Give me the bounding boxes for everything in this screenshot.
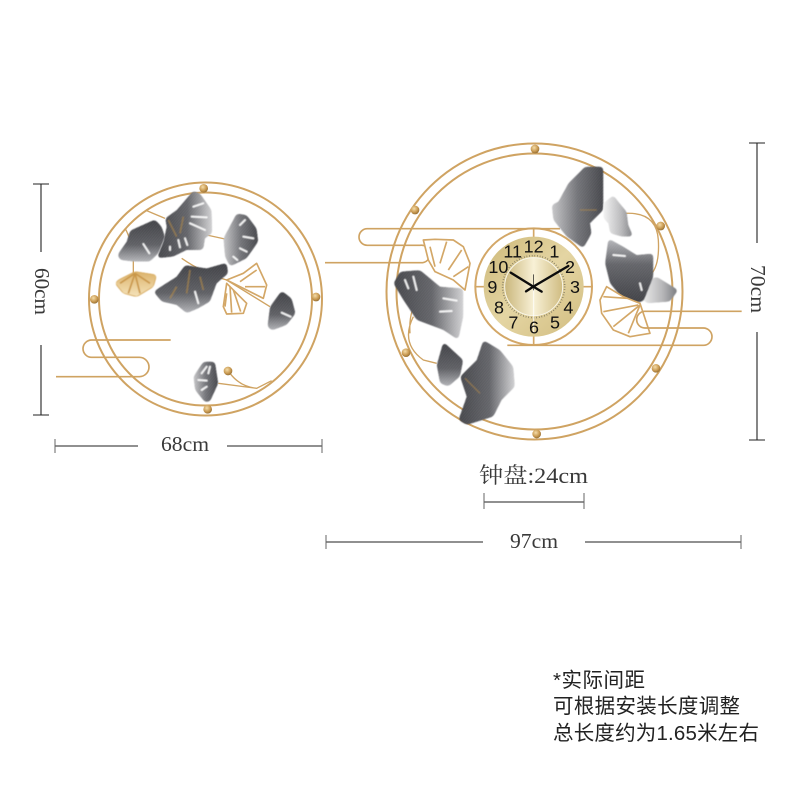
minute track xyxy=(503,256,565,318)
right wall piece xyxy=(325,143,742,439)
note text: 总长度约为1.65米左右 xyxy=(553,722,759,745)
clock numerals: 9 xyxy=(487,277,497,297)
dimension: 70cm: 70cm xyxy=(746,265,770,313)
clock numerals: 1 xyxy=(549,241,559,261)
leaf: small gold xyxy=(115,272,157,297)
clock outer ring xyxy=(475,228,592,345)
leaf: gold openwork right xyxy=(600,287,650,337)
dimension: 60cm xyxy=(30,184,54,415)
dimension: 60cm: 60cm xyxy=(30,268,54,315)
leaf: upper left xyxy=(117,219,165,262)
dimension: 68cm xyxy=(55,432,322,456)
clock numerals: 5 xyxy=(550,313,560,333)
leaf: right dark xyxy=(267,291,296,331)
leaf: right large xyxy=(605,238,653,303)
dimension: 97cm: 97cm xyxy=(510,529,558,553)
clock inner dial xyxy=(504,257,563,316)
clock face xyxy=(484,237,584,337)
leaf: middle large xyxy=(153,263,228,313)
dimension: 68cm: 68cm xyxy=(161,432,209,456)
clock numerals xyxy=(487,237,580,338)
leaf: top large xyxy=(552,167,603,248)
left paperclip rail xyxy=(56,340,171,377)
leaf: bottom large xyxy=(458,340,515,425)
right leaf stems xyxy=(408,213,659,363)
leaf: gold openwork pair xyxy=(223,263,267,314)
clock numerals: 7 xyxy=(508,313,518,333)
leaf: gold openwork left xyxy=(423,239,470,290)
clock numerals: 12 xyxy=(524,237,544,257)
leaf: left large xyxy=(393,270,463,340)
clock ring spokes xyxy=(475,228,592,345)
right rail lower xyxy=(507,311,742,345)
left ring beads xyxy=(90,184,320,414)
clock numerals: 6 xyxy=(529,318,539,338)
note text: *实际间距 xyxy=(553,669,645,692)
leaf: pale upper xyxy=(603,195,633,237)
right rail upper xyxy=(325,229,560,263)
right outer and inner rings xyxy=(386,143,682,439)
dimension: 70cm xyxy=(746,143,770,440)
clock numerals: 10 xyxy=(488,257,508,277)
clock xyxy=(475,228,592,345)
clock numerals: 11 xyxy=(503,241,522,261)
leaf: upper right xyxy=(223,213,258,267)
right ring beads xyxy=(402,145,665,438)
leaf: right pale backing xyxy=(640,277,678,303)
clock numerals: 4 xyxy=(563,298,573,318)
dimension: dial 24cm xyxy=(479,463,588,509)
leaf: upper large xyxy=(157,191,212,258)
gold ball ornament xyxy=(224,367,232,375)
left leaf stems xyxy=(125,211,272,388)
clock numerals: 3 xyxy=(570,277,580,297)
leaf: lower small xyxy=(437,342,463,387)
dimension: 97cm xyxy=(326,529,741,553)
dimension: dial 24cm: 钟盘:24cm xyxy=(479,463,588,488)
note text: 可根据安装长度调整 xyxy=(553,695,740,718)
clock numerals: 8 xyxy=(494,298,504,318)
clock numerals: 2 xyxy=(565,257,575,277)
leaf: bottom small xyxy=(193,362,218,402)
left wall piece xyxy=(56,182,322,415)
clock hands xyxy=(511,266,568,292)
left outer and inner rings xyxy=(89,182,322,415)
note text xyxy=(553,669,759,745)
highlight xyxy=(532,290,535,333)
